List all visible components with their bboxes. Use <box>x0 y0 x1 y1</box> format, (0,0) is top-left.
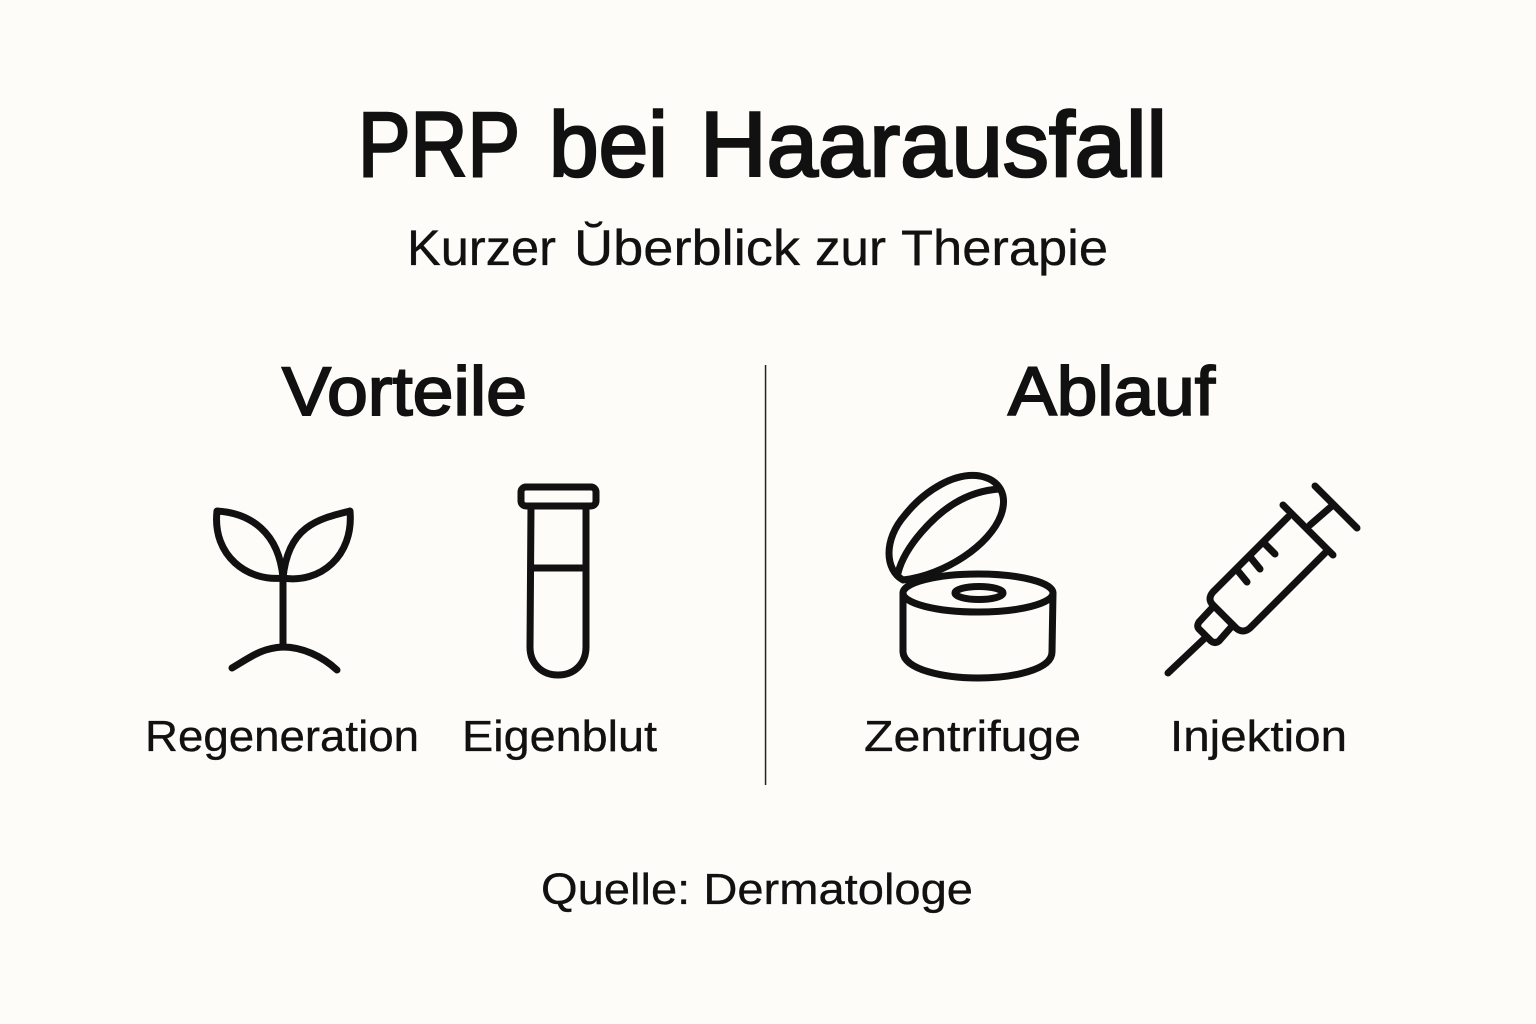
title: Haarausfall <box>700 94 1167 196</box>
label: Regeneration: Regeneration <box>145 712 419 761</box>
divider <box>765 365 766 785</box>
subtitle: Therapie <box>901 220 1108 276</box>
title <box>358 94 1167 196</box>
subtitle: zur <box>815 220 886 276</box>
label: Eigenblut: Eigenblut <box>462 712 657 761</box>
label: Injektion: Injektion <box>1170 712 1347 761</box>
heading: Ablauf: Ablauf <box>1008 353 1216 430</box>
label: Zentrifuge: Zentrifuge <box>864 712 1081 761</box>
title: bei <box>549 94 668 196</box>
title: PRP <box>358 94 520 196</box>
icon: test tube <box>521 487 596 675</box>
icon: syringe <box>1168 486 1357 673</box>
source: Quelle: Dermatologe <box>541 865 973 914</box>
icon: sprout <box>217 511 350 670</box>
subtitle: Ŭberblick <box>574 220 801 276</box>
heading: Vorteile: Vorteile <box>282 353 527 430</box>
icon: centrifuge <box>889 475 1053 678</box>
subtitle <box>407 220 1108 276</box>
subtitle: Kurzer <box>407 220 556 276</box>
